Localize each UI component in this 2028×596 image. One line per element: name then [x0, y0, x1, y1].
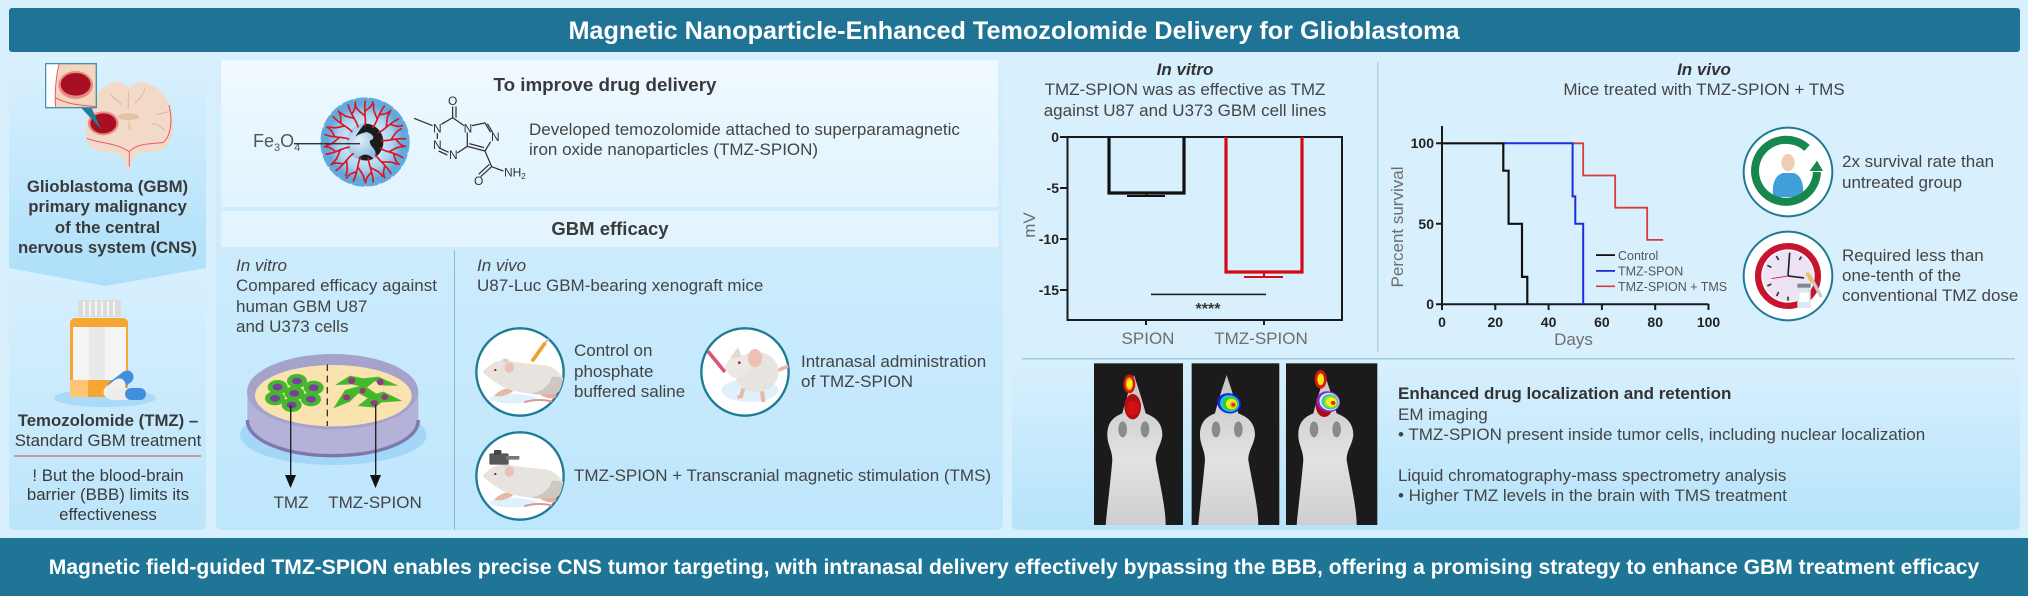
- text: intranasal: of TMZ-SPION: [801, 372, 913, 391]
- text: temozolomide: barrier (BBB) limits its: [27, 485, 189, 504]
- text: dose: conventional TMZ dose: [1842, 286, 2018, 305]
- text: temozolomide: [14, 411, 202, 524]
- y axis label: mV: [1020, 212, 1039, 238]
- text: developed temozolomide: [529, 120, 960, 159]
- text: control: [574, 341, 685, 401]
- icon: TMS mouse: [476, 432, 565, 520]
- tick labels: 20: [1488, 314, 1503, 330]
- text: survival: untreated group: [1842, 173, 1962, 192]
- footer banner: [0, 538, 2028, 596]
- curve: control: [1442, 143, 1527, 304]
- curve: TMZ-SPION + TMS: [1572, 143, 1663, 240]
- significance: [1151, 294, 1266, 318]
- bar chart: membrane potential: [1020, 129, 1342, 348]
- heading: GBM efficacy: [221, 211, 998, 247]
- text: in vitro result: [1044, 60, 1326, 120]
- y axis ticks: -15: [1039, 282, 1059, 298]
- text: in vivo result: Mice treated with TMZ-SPION + TMS: [1563, 80, 1845, 99]
- curve: TMZ-SPION: [1503, 143, 1583, 304]
- icon: temozolomide molecule: O: [448, 94, 457, 108]
- text: control: buffered saline: [574, 382, 685, 401]
- icon: iron oxide nanoparticle: O: [280, 131, 294, 151]
- tick labels: 0: [1438, 314, 1446, 330]
- mouse image: combined signal: [1286, 363, 1377, 525]
- icon: clock and vial: [1744, 232, 1832, 320]
- text: intranasal: Intranasal administration: [801, 352, 986, 371]
- sub-panel: to improve drug delivery: [221, 60, 998, 207]
- title banner: [9, 8, 2020, 52]
- text: intranasal: [801, 352, 986, 391]
- text: TMS: TMZ-SPION + Transcranial magnetic stimulation (TMS): [574, 466, 991, 485]
- y axis ticks: [1039, 129, 1059, 298]
- icon: medicine bottle and capsules: [54, 300, 156, 407]
- heading: glioblastoma: [18, 177, 197, 257]
- arrow: to TMZ: [285, 405, 296, 488]
- bar: SPION: [1109, 137, 1184, 196]
- panel: results: [1012, 57, 2020, 530]
- icon: brain with tumor inset: [46, 64, 173, 169]
- text: dose: Required less than: [1842, 246, 1984, 265]
- survival chart: [1388, 126, 1727, 349]
- text: enhanced drug localization: [1398, 384, 1925, 505]
- icon: temozolomide molecule: [414, 94, 526, 188]
- icon: survival person in arrow: [1744, 128, 1832, 216]
- text: enhanced drug localization: • Higher TMZ levels in the brain with TMS treatment: [1398, 486, 1787, 505]
- heading: glioblastoma: nervous system (CNS): [18, 238, 197, 257]
- tick labels: [1411, 135, 1720, 330]
- tick labels: 100: [1697, 314, 1720, 330]
- text: survival: [1842, 152, 1994, 192]
- legend: Control: [1618, 249, 1658, 263]
- text: in vivo result: [1563, 60, 1845, 99]
- icon: temozolomide molecule: 2: [521, 172, 526, 181]
- text: enhanced drug localization: Liquid chromatography-mass spectrometry analysis: [1398, 466, 1786, 485]
- icon: temozolomide molecule: N: [433, 121, 442, 135]
- icon: temozolomide molecule: N: [491, 130, 500, 144]
- x axis label: Days: [1554, 330, 1593, 349]
- arrow: to TMZ-SPION: [370, 405, 381, 488]
- heading: GBM efficacy: GBM efficacy: [551, 218, 669, 239]
- sub-panel: to improve drug delivery: To improve drug delivery: [494, 74, 717, 95]
- x axis labels: SPION: [1122, 329, 1174, 348]
- x axis labels: TMZ-SPION: [1214, 329, 1308, 348]
- sub-panel: in vivo setup: [476, 256, 991, 520]
- significance: ****: [1196, 301, 1221, 318]
- text: enhanced drug localization: EM imaging: [1398, 405, 1488, 424]
- sub-panel: in vitro setup: [236, 256, 437, 512]
- panel: drug delivery and GBM efficacy: [216, 57, 1003, 530]
- divider between in vitro and in vivo: [454, 250, 455, 530]
- title banner: Magnetic Nanoparticle-Enhanced Temozolomide Delivery for Glioblastoma: [568, 17, 1461, 45]
- mouse image: head rings: [1192, 363, 1279, 525]
- heading: glioblastoma: primary malignancy: [28, 197, 187, 216]
- icon: temozolomide molecule: O: [474, 174, 483, 188]
- text: dose: one-tenth of the: [1842, 266, 1961, 285]
- icon: iron oxide nanoparticle: Fe: [253, 131, 274, 151]
- mouse image: nose signal: [1094, 363, 1183, 525]
- y axis ticks: 0: [1051, 129, 1059, 145]
- text: in vitro result: TMZ-SPION was as effective as TMZ: [1045, 80, 1325, 99]
- legend: [1596, 249, 1727, 294]
- text: enhanced drug localization: Enhanced drug localization and retention: [1398, 384, 1731, 403]
- text: control: phosphate: [574, 362, 653, 381]
- text: in vivo result: In vivo: [1677, 60, 1731, 79]
- labels: TMZ and TMZ-SPION: [274, 493, 422, 512]
- text: in vitro result: against U87 and U373 GBM cell lines: [1044, 101, 1326, 120]
- text: enhanced drug localization: • TMZ-SPION present inside tumor cells, including nuclear localization: [1398, 425, 1925, 444]
- icon: intranasal mouse: [701, 328, 790, 416]
- icon: iron oxide nanoparticle: [253, 99, 408, 185]
- images: bioluminescence mice: [1094, 363, 1377, 525]
- legend: TMZ-SPON: [1618, 264, 1683, 278]
- sub-panel: in vitro setup: In vitro: [236, 256, 287, 275]
- text: control: Control on: [574, 341, 652, 360]
- text: temozolomide: Temozolomide (TMZ) –: [18, 411, 198, 430]
- sub-panel: in vitro setup: human GBM U87: [236, 297, 367, 316]
- text: developed temozolomide: Developed temozolomide attached to superparamagnetic: [529, 120, 960, 139]
- text: survival: 2x survival rate than: [1842, 152, 1994, 171]
- y axis label: Percent survival: [1388, 167, 1407, 287]
- text: dose: [1842, 246, 2018, 305]
- sub-panel: in vivo setup: In vivo: [477, 256, 526, 275]
- icon: petri dish with cells: [240, 354, 427, 465]
- icon: temozolomide molecule: N: [433, 138, 442, 152]
- text: temozolomide: effectiveness: [59, 505, 157, 524]
- tick labels: 60: [1594, 314, 1610, 330]
- icon: temozolomide molecule: NH: [504, 165, 521, 179]
- sub-panel: in vivo setup: U87-Luc GBM-bearing xenograft mice: [477, 276, 763, 295]
- sub-panel: in vitro setup: Compared efficacy against: [236, 276, 437, 295]
- x axis labels: [1122, 329, 1308, 348]
- text: in vitro result: In vitro: [1157, 60, 1213, 79]
- tick labels: 40: [1541, 314, 1557, 330]
- text: temozolomide: ! But the blood-brain: [32, 466, 184, 485]
- y axis ticks: -10: [1039, 231, 1059, 247]
- sub-panel: in vitro setup: and U373 cells: [236, 317, 348, 336]
- icon: iron oxide nanoparticle: 4: [294, 142, 300, 154]
- text: temozolomide: Standard GBM treatment: [15, 431, 202, 450]
- tick labels: 50: [1418, 216, 1434, 232]
- labels: TMZ and TMZ-SPION: TMZ-SPION: [328, 493, 422, 512]
- legend: TMZ-SPION + TMS: [1618, 280, 1727, 294]
- labels: TMZ and TMZ-SPION: TMZ: [274, 493, 308, 512]
- tick labels: 0: [1426, 296, 1434, 312]
- y axis ticks: -5: [1047, 180, 1059, 196]
- heading: glioblastoma: of the central: [55, 218, 160, 237]
- tick labels: 100: [1411, 135, 1434, 151]
- heading: glioblastoma: Glioblastoma (GBM): [27, 177, 188, 196]
- icon: iron oxide nanoparticle: 3: [274, 142, 280, 154]
- panel: background and standard treatment: [9, 57, 206, 530]
- footer banner: Magnetic field-guided TMZ-SPION enables precise CNS tumor targeting, with intranasal delivery effectively bypassing the BBB, offering a promising strategy to enhance GBM treatment efficacy: [49, 556, 1980, 579]
- icon: temozolomide molecule: N: [449, 148, 458, 162]
- bar: TMZ-SPION: [1226, 137, 1302, 277]
- tick labels: 80: [1647, 314, 1663, 330]
- icon: control mouse: [476, 328, 565, 416]
- icon: temozolomide molecule: N: [464, 121, 472, 135]
- text: developed temozolomide: iron oxide nanoparticles (TMZ-SPION): [529, 140, 818, 159]
